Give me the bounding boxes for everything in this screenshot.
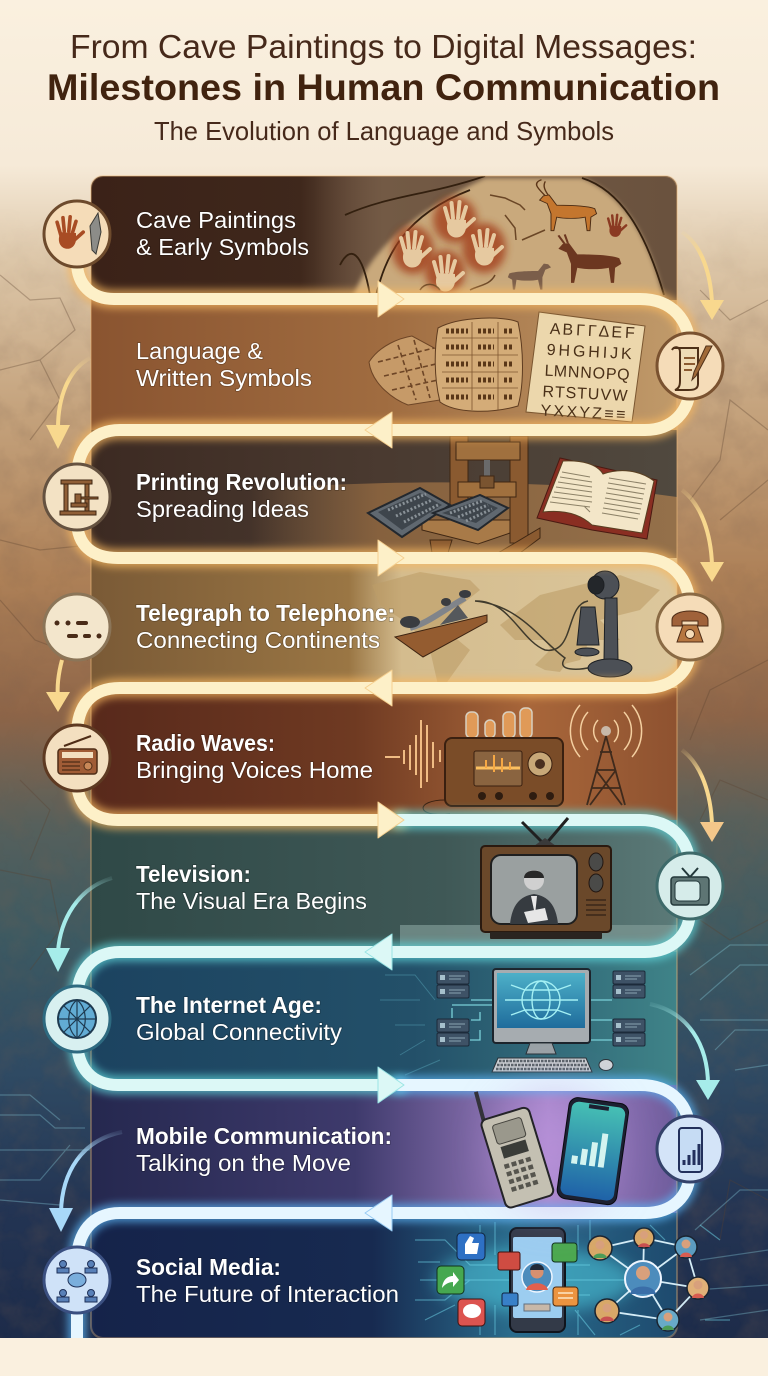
icon: morse code xyxy=(44,594,110,660)
arrow: language to printing xyxy=(46,358,90,449)
blue path segment xyxy=(77,1085,690,1345)
label: telegraph xyxy=(136,600,395,653)
label: telegraph: Connecting Continents xyxy=(136,627,380,653)
label: internet: The Internet Age: xyxy=(136,992,322,1018)
panel: internet xyxy=(91,952,677,1085)
painted animals xyxy=(420,180,626,290)
illustration: radio and tower xyxy=(385,705,642,815)
illustration: clay tablets and alphabet parchment: 9 H G H I J K xyxy=(546,342,632,363)
circuit glow xyxy=(435,1248,635,1312)
tv knobs xyxy=(586,853,606,915)
illustration: clay tablets and alphabet parchment: A B Γ Γ Δ E F xyxy=(549,321,635,342)
side arrows between milestones xyxy=(46,232,724,1232)
label: printing: Spreading Ideas xyxy=(136,496,309,522)
icon: television xyxy=(657,853,723,919)
label: language: Language & xyxy=(136,338,263,364)
stone wall mottling xyxy=(0,308,768,1338)
illustration: clay tablets and alphabet parchment: R T S T U V W xyxy=(542,384,629,405)
wooden press xyxy=(422,436,540,553)
cave rock arch xyxy=(300,176,677,300)
arrow: telegraph to radio xyxy=(46,660,70,712)
icon: globe xyxy=(44,986,110,1052)
title line 1: From Cave Paintings to Digital Messages: xyxy=(70,28,697,65)
arrow: cave to language xyxy=(682,232,724,320)
purple glow xyxy=(500,1095,610,1205)
label: mobile xyxy=(136,1123,392,1176)
arrow: radio to television xyxy=(682,750,724,842)
icon: scroll and quill xyxy=(657,333,723,399)
label: radio: Bringing Voices Home xyxy=(136,757,373,783)
open book xyxy=(537,458,657,539)
label: television xyxy=(136,861,367,914)
panel: telegraph xyxy=(91,558,677,688)
radio tower xyxy=(570,705,642,805)
icon: hand and stone xyxy=(44,201,110,267)
illustration: phones xyxy=(471,1079,630,1209)
label: cave paintings xyxy=(136,207,309,260)
label: internet: Global Connectivity xyxy=(136,1019,342,1045)
label: language: Written Symbols xyxy=(136,365,312,391)
illustration: clay tablets and alphabet parchment xyxy=(369,312,645,424)
title xyxy=(47,28,720,146)
icon: community xyxy=(44,1247,110,1313)
illustration: television xyxy=(481,818,611,939)
candlestick phone xyxy=(575,571,632,677)
wire xyxy=(475,601,592,669)
label: television: The Visual Era Begins xyxy=(136,888,367,914)
monitor xyxy=(493,969,590,1043)
smartphone xyxy=(556,1096,630,1206)
illustration: clay tablets and alphabet parchment: Y X X Y Z ≡ ≡ xyxy=(540,402,626,424)
label: radio: Radio Waves: xyxy=(136,730,275,756)
people network xyxy=(588,1228,709,1331)
radio body xyxy=(445,738,563,806)
sound wave xyxy=(385,720,440,788)
panel: mobile xyxy=(91,1085,677,1213)
path arrowheads xyxy=(365,281,404,1231)
app badges xyxy=(437,1233,578,1326)
label: cave paintings: Cave Paintings xyxy=(136,207,296,233)
panel: cave paintings xyxy=(91,176,677,300)
subtitle: The Evolution of Language and Symbols xyxy=(154,116,614,146)
vacuum tubes xyxy=(466,708,532,738)
arrow: internet to mobile xyxy=(650,1004,720,1100)
network links xyxy=(452,1000,612,1040)
label: social xyxy=(136,1254,399,1307)
arrow: mobile to social xyxy=(49,1132,122,1232)
icon: radio xyxy=(44,725,110,791)
circuit traces xyxy=(380,975,440,1075)
brick phone xyxy=(471,1079,555,1209)
illustration: printing press and open book xyxy=(368,436,657,553)
panel: television xyxy=(91,820,677,952)
timeline path xyxy=(77,250,690,1345)
panel rim xyxy=(91,176,677,1338)
label: printing xyxy=(136,469,347,522)
panel: social xyxy=(91,1213,677,1338)
circuit traces xyxy=(415,1220,730,1335)
keyboard and mouse xyxy=(492,1058,592,1072)
icon: mobile signal xyxy=(657,1116,723,1182)
type trays xyxy=(368,488,508,537)
label: telegraph: Telegraph to Telephone: xyxy=(136,600,395,626)
label: printing: Printing Revolution: xyxy=(136,469,347,495)
icon: telephone xyxy=(657,594,723,660)
illustration: social media xyxy=(415,1220,730,1335)
label: mobile: Talking on the Move xyxy=(136,1150,351,1176)
stone wall cracks xyxy=(0,275,768,1240)
footer band xyxy=(0,1338,768,1376)
label: television: Television: xyxy=(136,861,251,887)
timeline panel xyxy=(91,176,677,1338)
servers xyxy=(437,971,645,1046)
illustration: telegraph key and candlestick phone xyxy=(395,571,632,677)
label: cave paintings: & Early Symbols xyxy=(136,234,309,260)
label: language xyxy=(136,338,312,391)
cave rock fissures xyxy=(340,176,664,300)
hand stencils xyxy=(392,197,506,294)
circuit patterns xyxy=(0,945,768,1320)
label: social: The Future of Interaction xyxy=(136,1281,399,1307)
illustration: clay tablets and alphabet parchment: L M N N O P Q xyxy=(544,363,630,384)
panel: radio xyxy=(91,688,677,820)
panel: written symbols xyxy=(91,300,677,430)
icon: printing press xyxy=(44,464,110,530)
panel: printing xyxy=(91,430,677,558)
signal bars xyxy=(574,1130,605,1167)
label: mobile: Mobile Communication: xyxy=(136,1123,392,1149)
central phone xyxy=(510,1228,565,1332)
label: social: Social Media: xyxy=(136,1254,281,1280)
arrow: printing to telegraph xyxy=(682,490,724,582)
world map xyxy=(372,572,660,685)
telegraph key xyxy=(395,590,487,657)
arrow: television to internet xyxy=(46,878,112,972)
title line 2: Milestones in Human Communication xyxy=(47,67,720,108)
teal path segment xyxy=(77,820,690,1085)
label: internet xyxy=(136,992,342,1045)
label: radio xyxy=(136,730,373,783)
warm path segment xyxy=(77,250,690,820)
news anchor xyxy=(510,870,558,924)
illustration: internet computer network xyxy=(380,969,645,1075)
